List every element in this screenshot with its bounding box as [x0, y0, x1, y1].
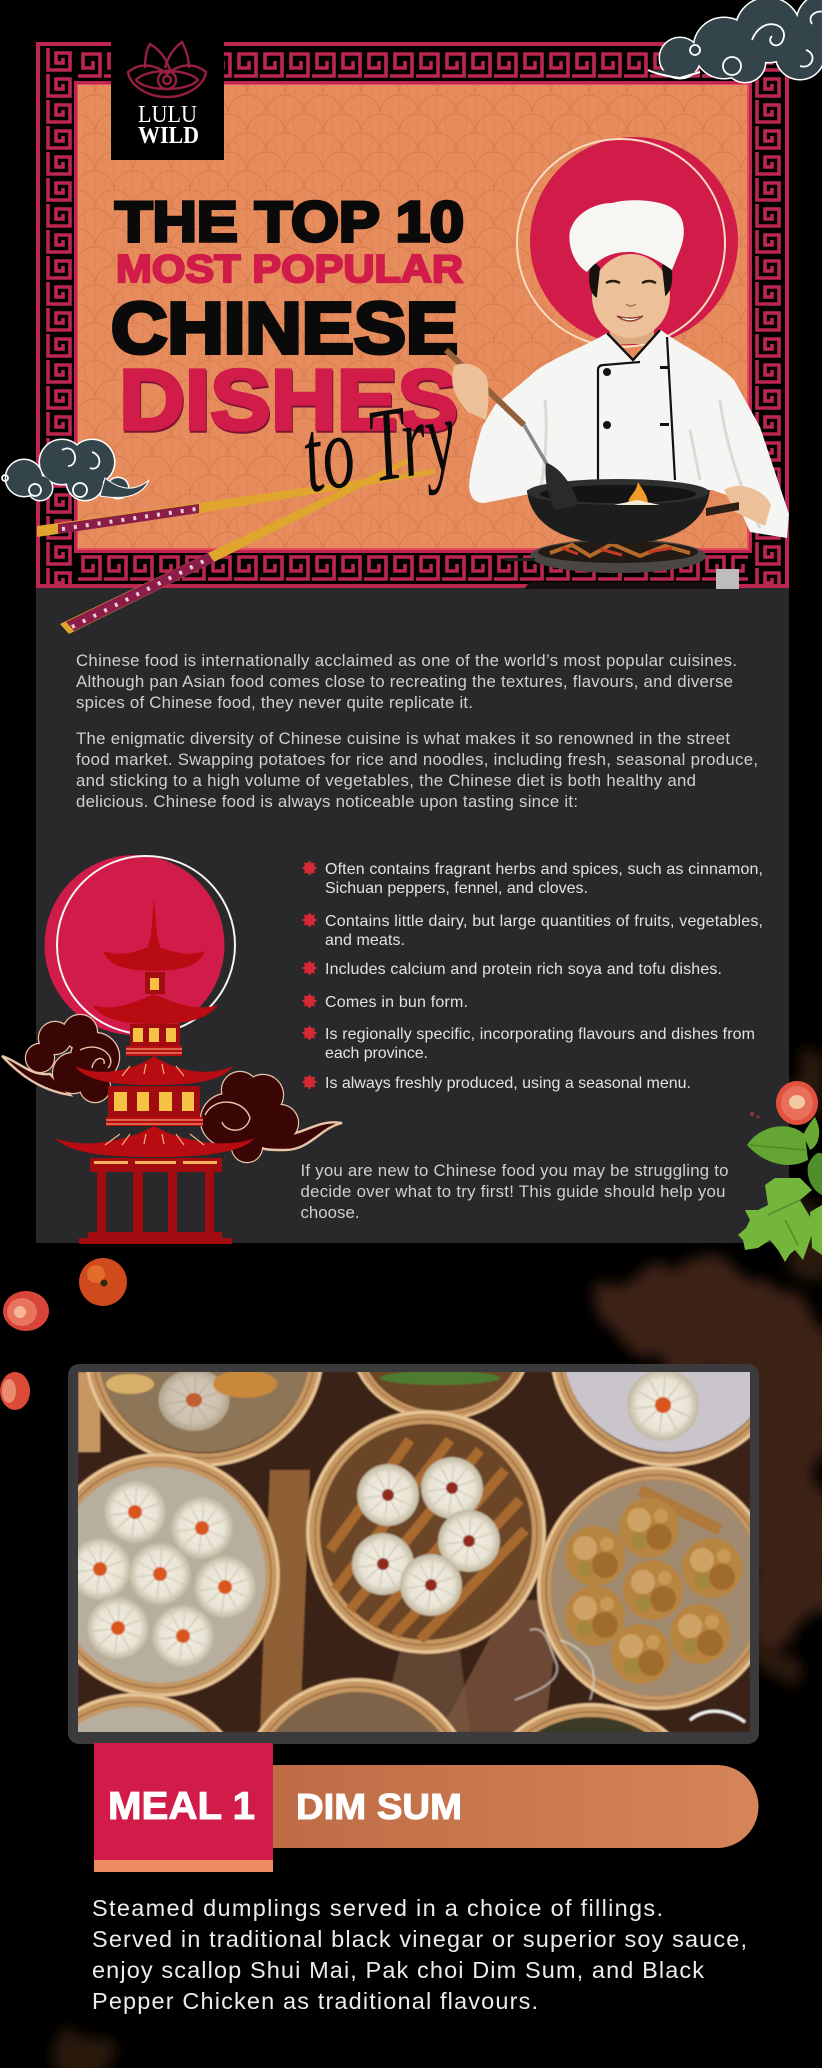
closing paragraph: decide over what to try first! This guide should help you [300, 1182, 726, 1201]
bullet list: Is always freshly produced, using a seasonal menu. [325, 1075, 691, 1092]
chopsticks [37, 457, 435, 634]
cloud: top right [648, 0, 822, 82]
chef left hand [452, 364, 489, 420]
title: THE TOP 10 [115, 190, 464, 254]
steamer: right [537, 1466, 777, 1710]
bullet list: Comes in bun form. [325, 994, 468, 1011]
heading bar: Meal 1 Dim Sum [94, 1743, 758, 1872]
heading bar: Meal 1 Dim Sum: DIM SUM [296, 1786, 462, 1827]
meal description: Served in traditional black vinegar or superior soy sauce, [92, 1926, 747, 1952]
tomatoes [0, 1258, 127, 1410]
bullet list [302, 861, 763, 1092]
smoke: background brown clouds [50, 1045, 822, 2068]
spatula [446, 350, 524, 425]
chef illustration [446, 137, 789, 589]
steamer: top centre [356, 1372, 526, 1418]
lower pan with food [530, 539, 706, 573]
intro paragraph 2: delicious. Chinese food is always noticeable upon tasting since it: [76, 792, 578, 811]
intro paragraph 1: spices of Chinese food, they never quite replicate it. [76, 693, 473, 712]
script text: to Try: to Try [295, 378, 463, 515]
bullet list: Sichuan peppers, fennel, and cloves. [325, 880, 588, 897]
cloud: left [2, 440, 149, 500]
chef right hand [724, 486, 771, 526]
burner [524, 570, 739, 589]
intro paragraph 2 [76, 729, 758, 811]
closing paragraph: choose. [300, 1203, 360, 1222]
title: CHINESE [111, 289, 458, 369]
intro paragraph 1: Chinese food is internationally acclaimed as one of the world’s most popular cuisines. [76, 651, 737, 670]
chef hat [569, 200, 684, 272]
meal description [92, 1895, 747, 2014]
cilantro [738, 1178, 815, 1262]
steam wisps [515, 1629, 594, 1700]
bullet list: Contains little dairy, but large quantities of fruits, vegetables, [325, 913, 763, 930]
wok [527, 490, 710, 544]
meal description: Steamed dumplings served in a choice of fillings. [92, 1895, 663, 1921]
title [111, 190, 464, 450]
intro paragraph 2: The enigmatic diversity of Chinese cuisine is what makes it so renowned in the street [76, 729, 730, 748]
pagoda [55, 897, 255, 1244]
title: DISHES [120, 355, 459, 450]
closing paragraph: If you are new to Chinese food you may be struggling to [300, 1161, 728, 1180]
pagoda illustration with sun and clouds [2, 855, 342, 1244]
bullet list: Often contains fragrant herbs and spices, such as cinnamon, [325, 861, 763, 878]
flame [628, 482, 648, 505]
steamer: left [78, 1452, 281, 1698]
heading bar: Meal 1 Dim Sum: MEAL 1 [108, 1785, 255, 1828]
meal description: Pepper Chicken as traditional flavours. [92, 1988, 538, 2014]
intro paragraph 1: Although pan Asian food comes close to recreating the textures, flavours, and diverse [76, 672, 733, 691]
meal description: enjoy scallop Shui Mai, Pak choi Dim Sum, and Black [92, 1957, 704, 1983]
closing paragraph [300, 1161, 728, 1222]
intro paragraph 1 [76, 651, 737, 712]
bullet list: Includes calcium and protein rich soya and tofu dishes. [325, 961, 722, 978]
hero frame with Greek-key border [36, 42, 789, 588]
intro paragraph 2: and sticking to a high volume of vegetables, the Chinese diet is both healthy and [76, 771, 696, 790]
steamer: top right [550, 1372, 750, 1468]
title: MOST POPULAR [116, 248, 463, 291]
basil leaves [747, 1126, 808, 1165]
steamer: centre [306, 1410, 546, 1654]
steamer: top left [85, 1372, 324, 1467]
herbs and tomato slice [738, 1081, 822, 1262]
intro paragraph 2: food market. Swapping potatoes for rice and noodles, including fresh, seasonal produce, [76, 750, 758, 769]
logo: Lulu Wild [111, 42, 224, 160]
bullet list: each province. [325, 1045, 428, 1062]
bullet icons [302, 861, 316, 1089]
steamers: bottom row [78, 1692, 224, 1732]
dark cloud right [201, 1072, 342, 1162]
logo: Lulu Wild: LULU [138, 102, 197, 128]
bullet list: Is regionally specific, incorporating flavours and dishes from [325, 1026, 755, 1043]
bullet list: and meats. [325, 932, 405, 949]
logo: Lulu Wild: WILD [138, 123, 199, 149]
title: DISHES [119, 353, 458, 448]
photo: dim sum steamers [0, 1364, 759, 1744]
dark cloud left [2, 1015, 119, 1102]
panel: introduction background [36, 586, 789, 1243]
